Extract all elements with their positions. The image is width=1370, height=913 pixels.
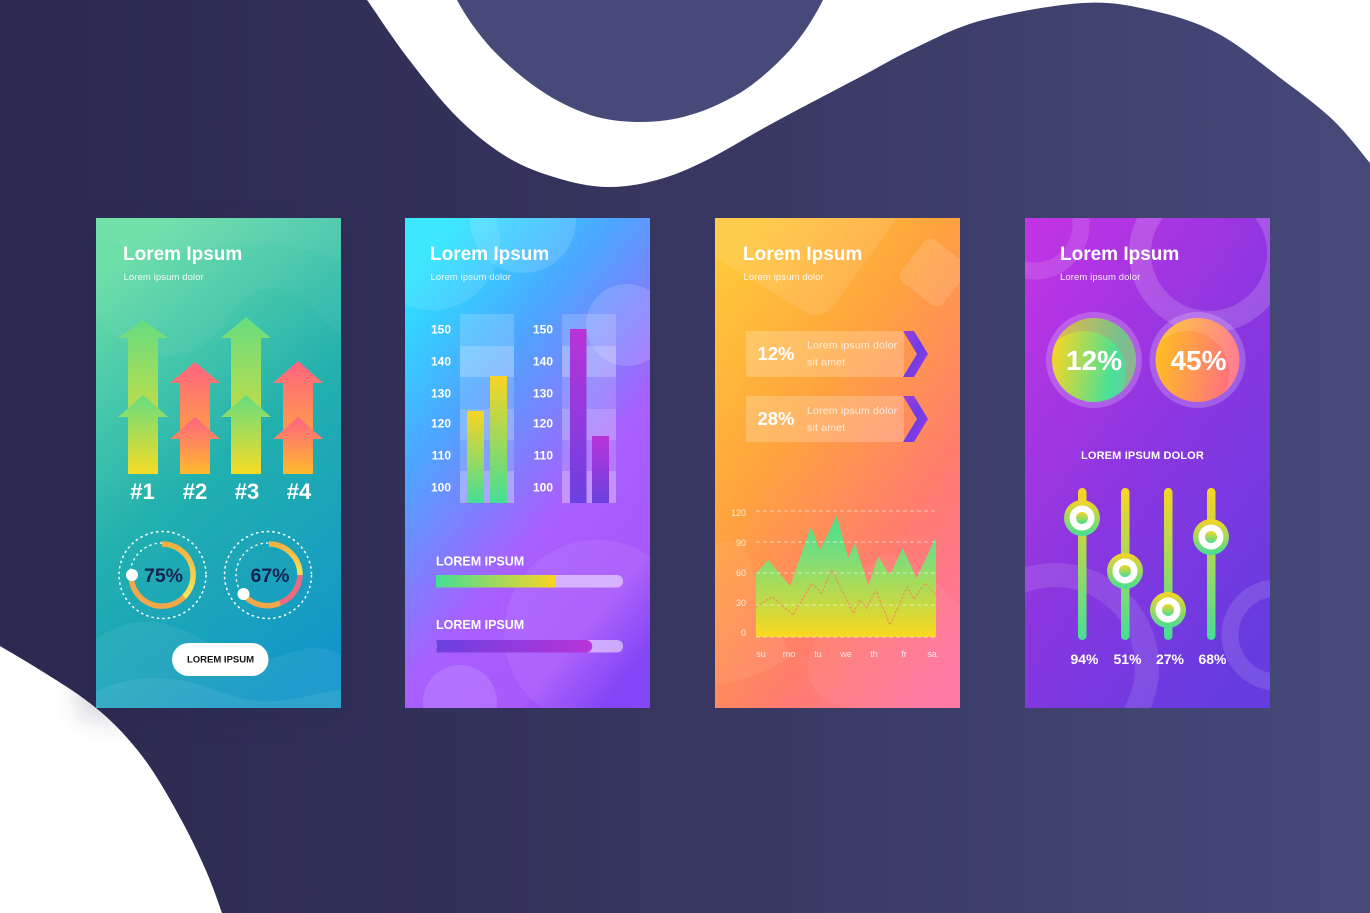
callout 28%: sit amet — [807, 422, 845, 434]
callout 12%: sit amet — [807, 356, 845, 368]
background: top semicircle blob — [457, 0, 823, 122]
right bar chart: 110 — [534, 448, 553, 462]
left bar chart: 110 — [432, 448, 451, 462]
area chart: we — [839, 649, 852, 659]
heading — [1060, 244, 1179, 283]
donut gauge 67%: 67% — [250, 565, 290, 587]
circle stat 45% — [1150, 312, 1246, 408]
right bar chart — [533, 314, 616, 503]
area chart: su — [756, 649, 766, 659]
circle stat 45%: 45% — [1170, 345, 1227, 376]
heading: Lorem Ipsum — [430, 244, 549, 265]
arrow #2 — [170, 362, 220, 474]
heading: Lorem Ipsum — [1060, 244, 1179, 265]
panel: green arrows card — [96, 218, 341, 708]
arrow #1 — [118, 320, 168, 474]
panel: blue bar chart card — [405, 218, 650, 708]
slider 27%: 27% — [1156, 651, 1185, 667]
progress bar 2 — [436, 618, 623, 652]
heading: Lorem Ipsum — [123, 244, 242, 265]
heading — [743, 244, 862, 283]
donut gauge 67% — [224, 532, 312, 618]
area chart: 30 — [736, 598, 746, 608]
circle stat 12% — [1046, 312, 1142, 408]
callout 28%: Lorem ipsum dolor — [807, 405, 898, 417]
slider 51% — [1107, 488, 1143, 667]
left bar chart — [431, 314, 514, 503]
slider 51%: 51% — [1113, 651, 1142, 667]
right bar chart: 150 — [533, 322, 553, 336]
slider 94%: 94% — [1070, 651, 1099, 667]
donut gauge 75%: 75% — [144, 565, 183, 587]
card shadow — [80, 226, 350, 718]
heading: Lorem Ipsum — [743, 244, 862, 265]
arrow rank labels: #1 — [130, 479, 155, 504]
area chart: sa — [927, 649, 937, 659]
circle stat 12%: 12% — [1066, 345, 1122, 376]
left bar chart: 140 — [431, 354, 451, 368]
chevron — [903, 396, 928, 442]
area chart — [731, 508, 937, 659]
area chart: th — [870, 649, 878, 659]
arrow rank labels: #3 — [235, 479, 259, 504]
chevron — [903, 331, 928, 377]
panel: purple sliders card — [1025, 218, 1270, 708]
left bar chart: 150 — [431, 322, 451, 336]
callout 12%: Lorem ipsum dolor — [807, 340, 898, 352]
heading — [430, 244, 549, 283]
right bar chart: 120 — [533, 416, 553, 430]
heading: Lorem ipsum dolor — [744, 272, 824, 283]
left bar chart: 120 — [431, 416, 451, 430]
arrow #4 — [273, 361, 323, 474]
progress bar 1 — [436, 554, 623, 588]
button — [172, 643, 268, 676]
arrow #3 — [221, 317, 271, 474]
area chart: tu — [814, 649, 822, 659]
donut gauge 75% — [119, 532, 206, 618]
area chart: 90 — [736, 538, 746, 548]
arrow rank labels: #2 — [183, 479, 207, 504]
area chart: 120 — [731, 508, 746, 518]
arrow rank labels — [130, 479, 312, 504]
callout 12%: 12% — [757, 343, 795, 364]
right bar chart: 140 — [533, 354, 553, 368]
right bar chart: 100 — [533, 480, 553, 494]
heading — [123, 244, 242, 283]
left bar chart: 100 — [431, 480, 451, 494]
slider 27% — [1150, 488, 1186, 667]
heading: Lorem ipsum dolor — [1060, 272, 1140, 283]
heading: Lorem ipsum dolor — [124, 272, 204, 283]
callout 12% — [746, 331, 928, 377]
arrow rank labels: #4 — [287, 479, 312, 504]
left bar chart: 130 — [431, 386, 451, 400]
slider 68%: 68% — [1198, 651, 1227, 667]
slider 94% — [1064, 488, 1100, 667]
callout 28% — [746, 396, 928, 442]
right bar chart: 130 — [533, 386, 553, 400]
progress bar 2: LOREM IPSUM — [436, 618, 524, 632]
area chart: mo — [783, 649, 795, 659]
callout 28%: 28% — [757, 408, 795, 429]
section title: LOREM IPSUM DOLOR — [1081, 450, 1204, 462]
area chart: 0 — [741, 628, 746, 638]
button: LOREM IPSUM — [187, 654, 254, 666]
arrow chart: #1 to #4 — [118, 317, 323, 474]
slider 68% — [1193, 488, 1229, 667]
area chart: fr — [901, 649, 907, 659]
area chart: 60 — [736, 568, 746, 578]
panel: orange chart card — [715, 218, 971, 708]
heading: Lorem ipsum dolor — [430, 272, 511, 283]
progress bar 1: LOREM IPSUM — [436, 554, 524, 568]
